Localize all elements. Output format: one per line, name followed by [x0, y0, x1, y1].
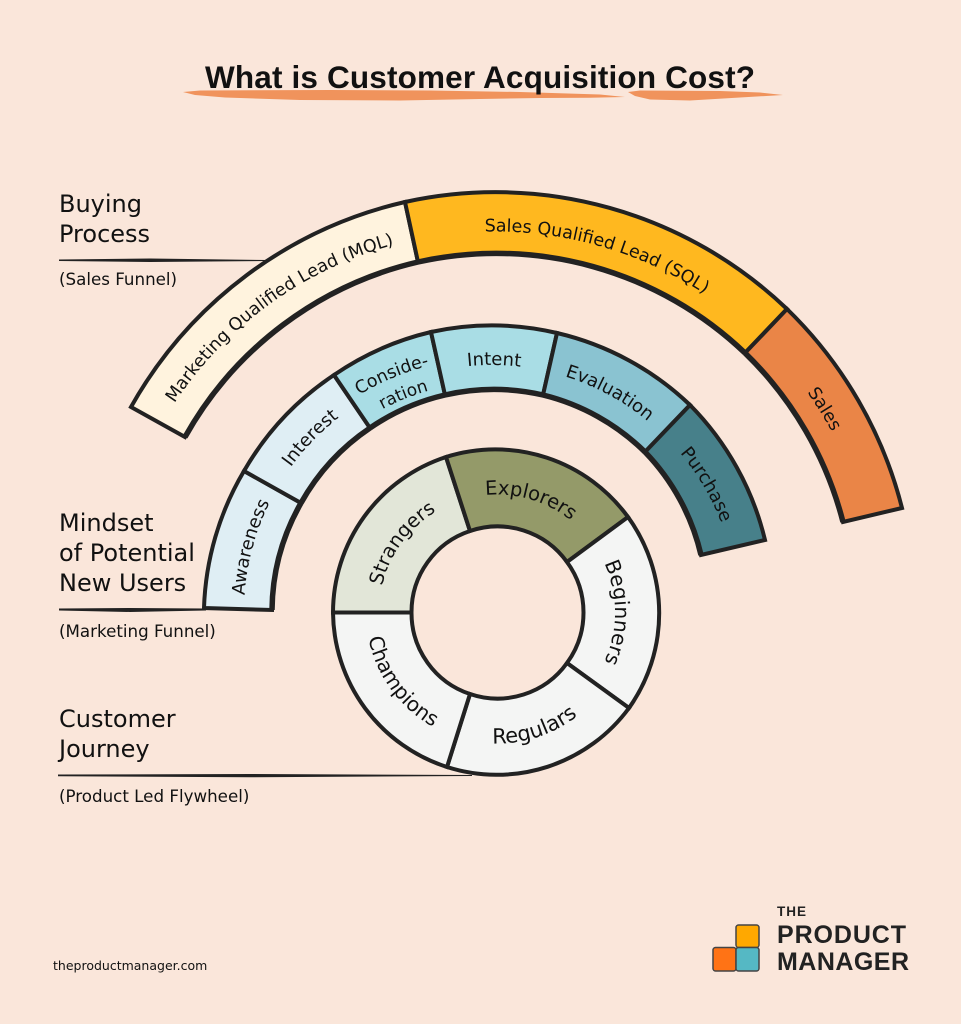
label: customer journey: Journey: [57, 735, 150, 763]
label: mindset of potential new users: of Potential: [59, 539, 195, 567]
segment: consideration: ration: [380, 382, 428, 408]
label: mindset of potential new users: New Users: [59, 569, 186, 597]
label: customer journey: (Product Led Flywheel): [59, 786, 249, 806]
label: buying process: Buying: [59, 190, 142, 218]
website url: theproductmanager.com: [53, 958, 207, 973]
segment: champions: [330, 610, 472, 770]
wordmark: THE: [777, 904, 806, 919]
segment: sales: Sales: [808, 387, 840, 430]
segment: sales: [743, 306, 904, 524]
segment: intent: Intent: [468, 352, 522, 367]
segment: strangers: [331, 454, 472, 614]
segment: awareness: [202, 468, 304, 612]
segment: marketing qualified lead: [128, 200, 419, 440]
segment: strangers: Strangers: [369, 503, 434, 584]
label: buying process: Process: [59, 220, 150, 248]
segment: regulars: [444, 660, 632, 777]
title: What is Customer Acquisition Cost?: [205, 59, 755, 95]
ring: mindset of potential new users (marketing funnel): [202, 323, 768, 612]
wordmark: MANAGER: [777, 948, 909, 976]
ring: customer journey (product led flywheel): [330, 447, 662, 777]
segment: sales qualified lead: [402, 190, 790, 355]
segment: consideration: [331, 330, 446, 430]
segment: evaluation: [542, 330, 693, 454]
label: mindset of potential new users: Mindset: [59, 509, 154, 537]
segment: marketing qualified lead: Marketing Qualified Lead (MQL): [164, 233, 392, 402]
segment: intent: [428, 323, 560, 398]
ring: buying process (sales funnel): [128, 190, 904, 524]
segment: awareness: Awareness: [232, 500, 268, 596]
segment: champions: Champions: [370, 636, 438, 726]
logo: the product manager: [713, 904, 909, 976]
segment: interest: Interest: [281, 410, 338, 466]
icon: logo blocks: [713, 925, 759, 971]
segment: interest: [241, 372, 372, 504]
segment: beginners: [564, 514, 662, 711]
segment: explorers: Explorers: [486, 480, 576, 519]
title underline brush stroke: [183, 90, 783, 100]
segment: regulars: Regulars: [494, 708, 576, 746]
segment: explorers: [444, 447, 631, 564]
segment: beginners: Beginners: [605, 560, 630, 665]
label: mindset of potential new users: [59, 509, 216, 641]
segment: purchase: Purchase: [681, 446, 730, 522]
label: buying process: (Sales Funnel): [59, 269, 177, 289]
segment: consideration: Conside-: [356, 358, 428, 392]
segment: evaluation: Evaluation: [566, 364, 652, 420]
label: customer journey: [57, 705, 472, 806]
wordmark: [777, 904, 909, 976]
label: customer journey: Customer: [59, 705, 176, 733]
segment: sales qualified lead: Sales Qualified Lead (SQL): [486, 218, 708, 294]
label: buying process: [59, 190, 268, 289]
segment: purchase: [643, 402, 768, 558]
label: mindset of potential new users: (Marketing Funnel): [59, 621, 216, 641]
wordmark: PRODUCT: [777, 921, 906, 949]
